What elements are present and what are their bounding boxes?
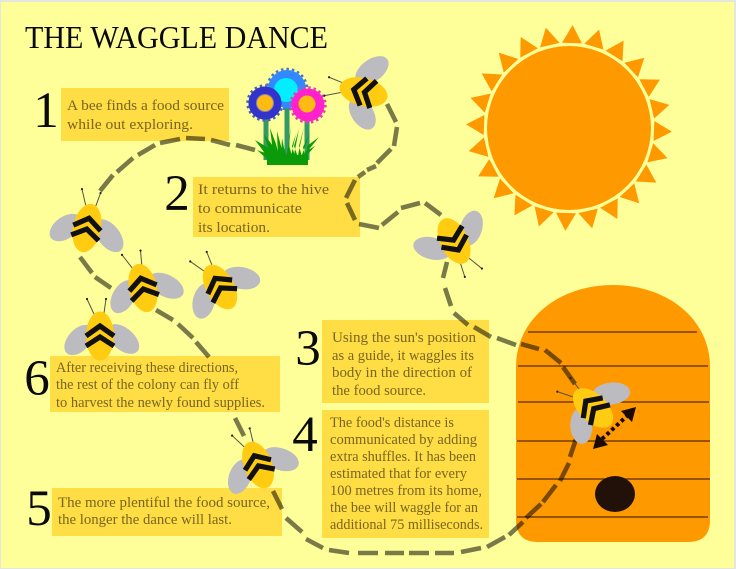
flower: light blue and cyan (248, 69, 307, 120)
flowers (248, 69, 326, 165)
flower: blue and yellow (248, 86, 282, 120)
hive (516, 285, 710, 542)
flower: magenta and yellow (290, 88, 326, 122)
title: THE WAGGLE DANCE (25, 19, 328, 55)
text box 4: The food's distance is (330, 415, 454, 431)
text box 1: while out exploring. (67, 117, 193, 133)
text box 3: body in the direction of (332, 365, 472, 381)
text box 4 (322, 410, 489, 538)
text box 5 (52, 488, 282, 536)
text box 1: A bee finds a food source (67, 98, 224, 114)
colony bee left (41, 182, 139, 261)
number 1: 1 (33, 83, 59, 139)
hive entrance (595, 476, 635, 512)
text box 4: extra shuffles. It has been (330, 449, 477, 465)
waggle direction arrow (593, 407, 636, 449)
number 3: 3 (295, 321, 321, 377)
bee near step 5 (205, 413, 309, 503)
text box 4: communicated by adding (330, 432, 477, 448)
text box 4: additional 75 milliseconds. (330, 517, 483, 533)
text box 2: to communicate (198, 201, 302, 217)
text box 5: The more plentiful the food source, (58, 495, 270, 511)
bee at flowers (317, 39, 398, 138)
text box 6: to harvest the newly found supplies. (56, 395, 265, 411)
text box 6: After receiving these directions, (56, 360, 238, 376)
number 6: 6 (24, 351, 50, 407)
grass (255, 126, 319, 165)
number 5: 5 (26, 481, 52, 537)
bee returning near hive (403, 201, 508, 295)
text box 4: estimated that for every (330, 466, 468, 482)
dashed flight path (80, 104, 576, 553)
text box 2: its location. (198, 220, 270, 236)
text box 1 (61, 88, 229, 141)
colony bee middle (94, 241, 192, 321)
text box 3: Using the sun's position (332, 330, 477, 346)
text box 2: It returns to the hive (198, 182, 329, 198)
text box 2 (193, 177, 360, 237)
number 2: 2 (164, 166, 190, 222)
text box 3: the food source. (332, 383, 426, 399)
bee dancing on hive (537, 349, 642, 455)
text box 4: 100 metres from its home, (330, 483, 482, 499)
icon: sun (466, 25, 672, 231)
colony bee right (165, 232, 271, 329)
text box 4: the bee will waggle for an (330, 500, 479, 516)
text box 3: as a guide, it waggles its (332, 348, 474, 364)
text box 6 (50, 356, 280, 412)
text box 3 (322, 320, 489, 403)
text box 6: the rest of the colony can fly off (56, 377, 239, 393)
bee above step 6 (59, 298, 145, 361)
text box 5: the longer the dance will last. (58, 512, 232, 528)
number 4: 4 (292, 407, 318, 463)
